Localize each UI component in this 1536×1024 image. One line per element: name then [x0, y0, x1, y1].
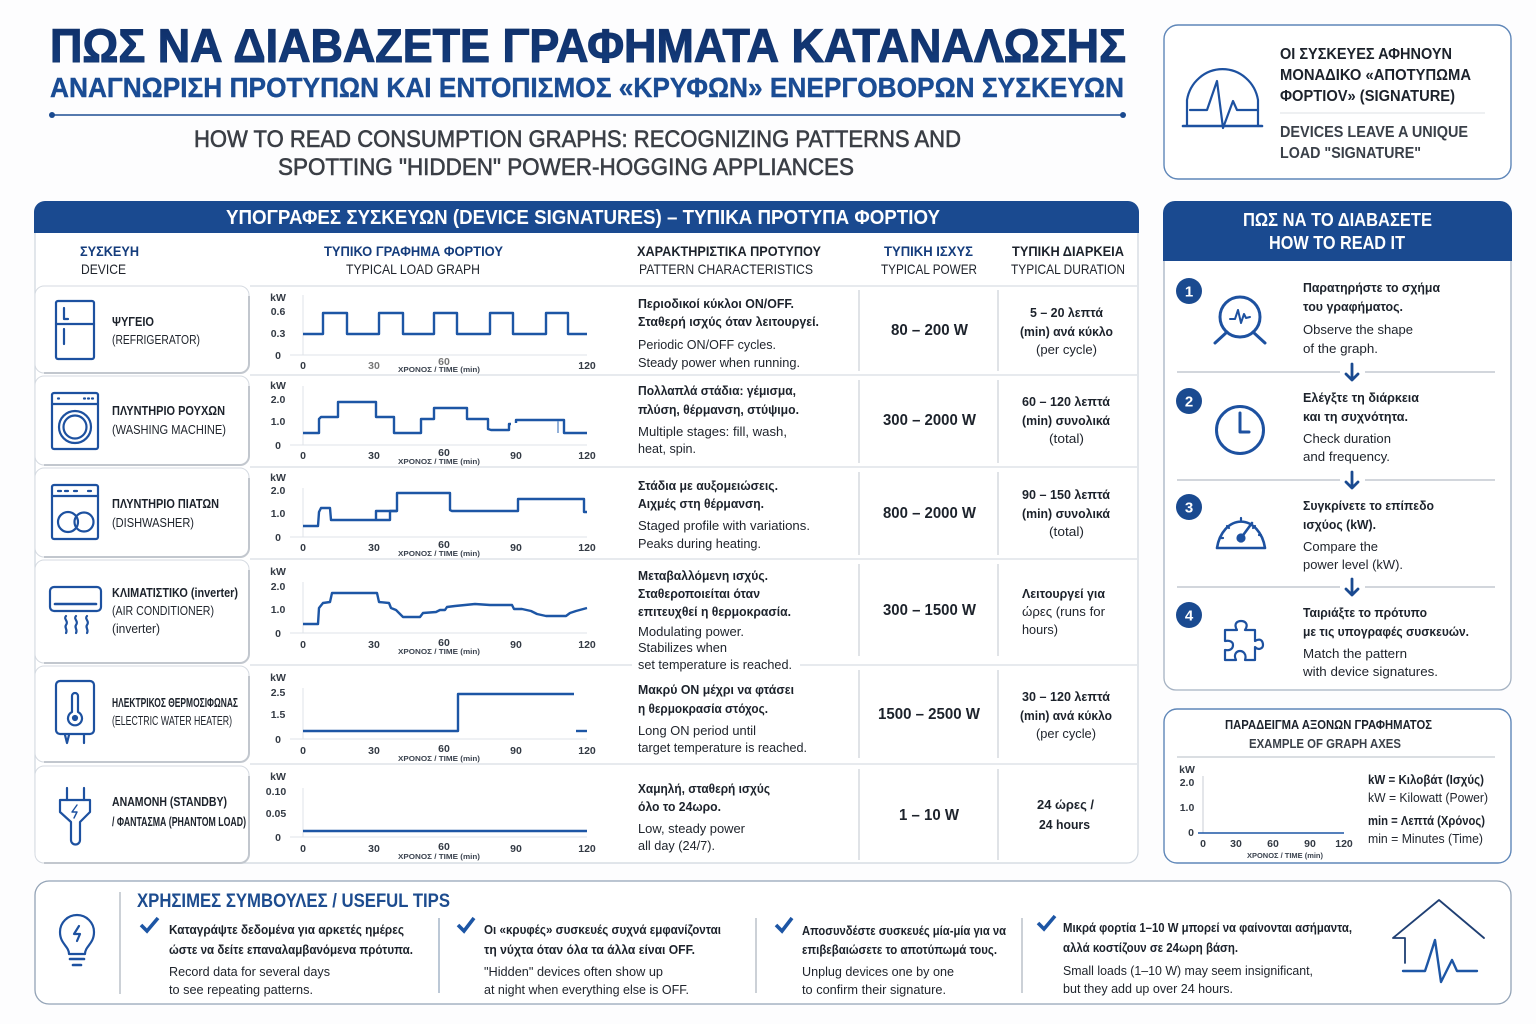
pattern characteristics: Low, steady power: [638, 821, 746, 836]
step 3 text: Συγκρίνετε το επίπεδο: [1303, 498, 1434, 513]
chart: standby load: 120: [578, 843, 596, 855]
chart: standby load: [266, 771, 596, 861]
typical power: 1500 – 2500 W: [878, 706, 981, 723]
icon: check 3: [776, 918, 792, 931]
row: air conditioner: [35, 560, 1106, 672]
title rule: [49, 112, 1126, 118]
chart: axes example: 1.0: [1180, 802, 1194, 814]
pattern characteristics: Multiple stages: fill, wash,: [638, 424, 787, 439]
typical duration: (min) συνολικά: [1022, 413, 1110, 428]
pattern characteristics: all day (24/7).: [638, 838, 715, 853]
step 2 text: και τη συχνότητα.: [1303, 409, 1408, 424]
typical duration: [1037, 797, 1094, 832]
step 4 text: με τις υπογραφές συσκευών.: [1303, 624, 1469, 639]
icon: check 4: [1038, 916, 1055, 929]
device card: air conditioner: [35, 560, 249, 663]
callout greek text: [1280, 46, 1471, 105]
pattern characteristics: set temperature is reached.: [638, 657, 792, 672]
step 3 text: Compare the: [1303, 539, 1378, 554]
chart: washing machine load: [270, 380, 596, 466]
tip 2: "Hidden" devices often show up: [484, 964, 663, 979]
device card: refrigerator: [35, 286, 249, 373]
chart: refrigerator load: 60: [438, 356, 450, 368]
callout greek text: ΦΟΡΤΙΟV» (SIGNATURE): [1280, 88, 1455, 105]
chart: air conditioner load: 120: [578, 639, 596, 651]
device name: [112, 695, 238, 728]
typical duration: 24 hours: [1039, 817, 1090, 832]
icon: refrigerator: [56, 301, 94, 359]
chart: air conditioner load: 0: [300, 639, 306, 651]
icon: air conditioner: [50, 587, 101, 633]
device name: (ELECTRIC WATER HEATER): [112, 713, 232, 728]
device name: (AIR CONDITIONER): [112, 603, 214, 618]
chart: air conditioner load: kW: [270, 566, 286, 578]
tip 1: Καταγράψτε δεδομένα για αρκετές ημέρες: [169, 922, 404, 937]
pattern characteristics: Πολλαπλά στάδια: γέμισμα,: [638, 383, 796, 398]
chart: washing machine load: 1.0: [271, 416, 285, 428]
device card: water heater: [35, 666, 249, 762]
callout english text: DEVICES LEAVE A UNIQUE: [1280, 124, 1468, 141]
chart: standby load: 0.05: [266, 808, 286, 820]
pattern characteristics: Long ON period until: [638, 723, 756, 738]
chart: refrigerator load: 0: [275, 350, 281, 362]
chart: standby load: 0.10: [266, 786, 286, 798]
chart: refrigerator load: ΧΡΟΝΟΣ / TIME (min): [398, 365, 481, 374]
chart: water heater load: [270, 672, 596, 763]
axes heading: ΠΑΡΑΔΕΙΓΜΑ ΑΞΟΝΩΝ ΓΡΑΦΗΜΑΤΟΣ: [1225, 717, 1432, 732]
callout english text: LOAD "SIGNATURE": [1280, 145, 1421, 162]
tip 1: to see repeating patterns.: [169, 982, 313, 997]
main title: ΠΩΣ ΝΑ ΔΙΑΒΑΖΕΤΕ ΓΡΑΦΗΜΑΤΑ ΚΑΤΑΝΑΛΩΣΗΣ: [50, 19, 1126, 72]
device name: / ΦΑΝΤΑΣΜΑ (PHANTOM LOAD): [112, 814, 246, 829]
pattern characteristics: Χαμηλή, σταθερή ισχύς: [638, 781, 770, 796]
chart: standby load: ΧΡΟΝΟΣ / TIME (min): [398, 852, 481, 861]
english subtitle: HOW TO READ CONSUMPTION GRAPHS: RECOGNIZING PATTERNS AND: [194, 126, 961, 153]
greek subtitle: ΑΝΑΓΝΩΡΙΣΗ ΠΡΟΤΥΠΩΝ ΚΑΙ ΕΝΤΟΠΙΣΜΟΣ «ΚΡΥΦΩΝ» ΕΝΕΡΓΟΒΟΡΩΝ ΣΥΣΚΕΥΩΝ: [50, 72, 1124, 103]
step 4 text: [1302, 605, 1469, 679]
typical duration: 30 – 120 λεπτά: [1022, 689, 1110, 704]
pattern characteristics: όλο το 24ωρο.: [638, 799, 721, 814]
pattern characteristics: [638, 383, 799, 456]
tip 1: ώστε να δείτε επαναλαμβανόμενα πρότυπα.: [169, 942, 413, 957]
chart: air conditioner load: 90: [510, 639, 522, 651]
step 4 text: Ταιριάξτε το πρότυπο: [1303, 605, 1427, 620]
chart: water heater load: 0: [275, 734, 281, 746]
tip 1: Record data for several days: [169, 964, 330, 979]
tip 4: [1038, 916, 1352, 996]
typical duration: (total): [1049, 524, 1084, 539]
row: standby phantom load: [35, 766, 1094, 863]
typical duration: 60 – 120 λεπτά: [1022, 394, 1110, 409]
chart: dishwasher load: 2.0: [271, 485, 285, 497]
step 2: [1176, 388, 1419, 464]
device card: washing machine: [35, 376, 249, 465]
typical power: 800 – 2000 W: [883, 505, 977, 522]
step 3 text: ισχύος (kW).: [1303, 517, 1376, 532]
device name: [112, 314, 200, 347]
pattern characteristics: target temperature is reached.: [638, 740, 807, 755]
pattern characteristics: heat, spin.: [638, 441, 696, 456]
typical duration: 90 – 150 λεπτά: [1022, 487, 1110, 502]
tip 4: Small loads (1–10 W) may seem insignificant,: [1063, 963, 1313, 978]
row: washing machine: [35, 376, 1110, 466]
tip 2: τη νύχτα όταν όλα τα άλλα είναι OFF.: [484, 942, 695, 957]
chart: standby load: 60: [438, 841, 450, 853]
chart: water heater load: 90: [510, 745, 522, 757]
icon: gauge: [1217, 518, 1265, 548]
step number 1: [1176, 278, 1202, 304]
pattern characteristics: Peaks during heating.: [638, 536, 761, 551]
step number 1: 1: [1185, 284, 1193, 300]
chart: washing machine load: 120: [578, 450, 596, 462]
device name: (DISHWASHER): [112, 515, 194, 530]
step 1 text: of the graph.: [1303, 341, 1378, 356]
typical duration: (min) ανά κύκλο: [1020, 708, 1112, 723]
column headings: ΧΑΡΑΚΤΗΡΙΣΤΙΚΑ ΠΡΟΤΥΠΟΥ: [637, 243, 822, 259]
icon: light bulb: [60, 915, 94, 965]
chart: water heater load: ΧΡΟΝΟΣ / TIME (min): [398, 754, 481, 763]
device name: (WASHING MACHINE): [112, 422, 226, 437]
chart: air conditioner load: 0: [275, 628, 281, 640]
device name: [112, 496, 219, 530]
chart: air conditioner load: 2.0: [271, 581, 285, 593]
row: refrigerator: [35, 286, 1113, 374]
chart: dishwasher load: 90: [510, 542, 522, 554]
icon: washing machine: [52, 393, 98, 449]
typical duration: hours): [1022, 622, 1058, 637]
how-to header: [1163, 201, 1512, 261]
step 4 text: with device signatures.: [1302, 664, 1438, 679]
step number 4: 4: [1185, 608, 1194, 624]
icon: magnifier with graph: [1215, 297, 1265, 343]
chart: dishwasher load: 30: [368, 542, 380, 554]
pattern characteristics: Μακρύ ON μέχρι να φτάσει: [638, 682, 794, 697]
chart: axes example: ΧΡΟΝΟΣ / TIME (min): [1247, 851, 1323, 860]
tip 2: Οι «κρυφές» συσκευές συχνά εμφανίζονται: [484, 922, 721, 937]
chart: standby load: 0: [275, 832, 281, 844]
step 3: [1176, 494, 1434, 572]
chart: dishwasher load: 120: [578, 542, 596, 554]
column headings: TYPICAL DURATION: [1011, 261, 1125, 277]
step number 2: 2: [1185, 394, 1193, 410]
callout greek text: ΟΙ ΣΥΣΚΕΥΕΣ ΑΦΗΝΟΥΝ: [1280, 46, 1452, 63]
device name: [112, 585, 238, 636]
axes legend: kW = Kilowatt (Power): [1368, 790, 1488, 805]
chart: axes example: [1179, 764, 1353, 860]
callout english text: [1280, 124, 1468, 162]
typical duration: Λειτουργεί για: [1022, 586, 1105, 601]
chart: axes example: 60: [1267, 838, 1279, 850]
chart: air conditioner load: 60: [438, 637, 450, 649]
icon: dome with load pulse: [1183, 69, 1262, 128]
typical duration: (per cycle): [1036, 342, 1097, 357]
device name: ΠΛΥΝΤΗΡΙΟ ΠΙΑΤΩΝ: [112, 496, 219, 511]
pattern characteristics: [638, 682, 807, 755]
arrow: step 1 to 2: [1177, 364, 1495, 380]
chart: refrigerator load: 0.6: [271, 306, 285, 318]
chart: dishwasher load: 0: [300, 542, 306, 554]
typical power: 300 – 2000 W: [883, 412, 977, 429]
step 4 text: Match the pattern: [1303, 646, 1407, 661]
typical duration: (total): [1049, 431, 1084, 446]
axes legend: kW = Κιλοβάτ (Ισχύς): [1368, 772, 1484, 787]
chart: washing machine load: 0: [275, 440, 281, 452]
chart: water heater load: kW: [270, 672, 286, 684]
typical duration: [1022, 487, 1110, 539]
device name: [112, 794, 246, 829]
icon: house with pulse: [1393, 900, 1484, 982]
typical duration: (min) συνολικά: [1022, 506, 1110, 521]
typical power: 300 – 1500 W: [883, 602, 977, 619]
pattern characteristics: η θερμοκρασία στόχος.: [638, 701, 768, 716]
chart: axes example: 0: [1200, 838, 1206, 850]
chart: axes example: 120: [1335, 838, 1353, 850]
icon: check 2: [458, 918, 474, 931]
chart: water heater load: 30: [368, 745, 380, 757]
typical duration: 24 ώρες /: [1037, 797, 1094, 812]
chart: axes example: 0: [1188, 827, 1194, 839]
chart: refrigerator load: 0.3: [271, 328, 285, 340]
column headings: ΤΥΠΙΚΗ ΙΣΧΥΣ: [884, 243, 973, 259]
typical power: 80 – 200 W: [891, 322, 969, 339]
row: electric water heater: [35, 666, 1112, 763]
chart: standby load: 30: [368, 843, 380, 855]
chart: refrigerator load: [270, 292, 596, 374]
step 1: [1176, 278, 1440, 356]
step number 3: 3: [1185, 500, 1193, 516]
icon: puzzle piece: [1225, 621, 1263, 660]
chart: water heater load: 1.5: [271, 709, 285, 721]
tip 4: Μικρά φορτία 1–10 W μπορεί να φαίνονται ασήμαντα,: [1063, 920, 1352, 935]
panel: useful tips: [35, 881, 1511, 1004]
column headings: TYPICAL LOAD GRAPH: [346, 261, 480, 277]
axes heading: [1225, 717, 1432, 751]
chart: refrigerator load: 120: [578, 360, 596, 372]
icon: plug: [60, 788, 90, 844]
device name: ΚΛΙΜΑΤΙΣΤΙΚΟ (inverter): [112, 585, 238, 600]
tip 4: but they add up over 24 hours.: [1063, 981, 1233, 996]
typical duration: ώρες (runs for: [1022, 604, 1106, 619]
chart: washing machine load: 30: [368, 450, 380, 462]
row: dishwasher: [35, 468, 1110, 558]
pattern characteristics: Modulating power.: [638, 624, 744, 639]
how-to header: ΠΩΣ ΝΑ ΤΟ ΔΙΑΒΑΣΕΤΕ: [1243, 210, 1432, 230]
arrow: step 2 to 3: [1177, 472, 1495, 488]
chart: dishwasher load: kW: [270, 472, 286, 484]
step 1 text: του γραφήματος.: [1303, 299, 1403, 314]
chart: air conditioner load: ΧΡΟΝΟΣ / TIME (min): [398, 647, 481, 656]
chart: refrigerator load: kW: [270, 292, 286, 304]
typical power: 1 – 10 W: [899, 807, 960, 824]
step 2 text: [1303, 390, 1419, 464]
chart: water heater load: 2.5: [271, 687, 285, 699]
step 2 text: Ελέγξτε τη διάρκεια: [1303, 390, 1419, 405]
panel: how to read it: [1163, 201, 1512, 690]
step number 4: [1176, 602, 1202, 628]
english subtitle: [194, 126, 961, 181]
chart: water heater load: 60: [438, 743, 450, 755]
icon: check 1: [141, 918, 158, 931]
chart: refrigerator load: 30: [368, 360, 380, 372]
pattern characteristics: [638, 296, 819, 370]
tip 3: [776, 918, 1006, 997]
tip 3: to confirm their signature.: [802, 982, 946, 997]
pattern characteristics: επιτευχθεί η θερμοκρασία.: [638, 604, 791, 619]
tip 2: at night when everything else is OFF.: [484, 982, 689, 997]
icon: clock: [1216, 406, 1264, 454]
pattern characteristics: Περιοδικοί κύκλοι ON/OFF.: [638, 296, 794, 311]
tip 4: αλλά κοστίζουν σε 24ωρη βάση.: [1063, 940, 1238, 955]
typical duration: [1022, 586, 1106, 637]
arrow: step 3 to 4: [1177, 579, 1495, 595]
column headings: ΣΥΣΚΕΥΗ: [80, 243, 139, 259]
panel: device signatures table: [34, 201, 1139, 863]
step 3 text: power level (kW).: [1303, 557, 1403, 572]
pattern characteristics: Μεταβαλλόμενη ισχύς.: [638, 568, 768, 583]
device name: (REFRIGERATOR): [112, 332, 200, 347]
column headings: TYPICAL POWER: [881, 261, 977, 277]
device name: ΨΥΓΕΙΟ: [112, 314, 154, 329]
panel: example of graph axes: [1164, 709, 1511, 863]
panel: signature callout: [1164, 25, 1511, 179]
chart: washing machine load: ΧΡΟΝΟΣ / TIME (min): [398, 457, 481, 466]
chart: standby load: 90: [510, 843, 522, 855]
column headings: ΤΥΠΙΚΟ ΓΡΑΦΗΜΑ ΦΟΡΤΙΟΥ: [324, 243, 504, 259]
step 1 text: Παρατηρήστε το σχήμα: [1303, 280, 1440, 295]
chart: washing machine load: 60: [438, 447, 450, 459]
chart: washing machine load: 2.0: [271, 394, 285, 406]
step 1 text: [1303, 280, 1440, 356]
tip 2: [458, 918, 721, 997]
column headings: [80, 243, 1125, 277]
device name: (inverter): [112, 621, 160, 636]
english subtitle: SPOTTING "HIDDEN" POWER-HOGGING APPLIANCES: [278, 154, 854, 181]
chart: standby load: kW: [270, 771, 286, 783]
device name: ΠΛΥΝΤΗΡΙΟ ΡΟΥΧΩΝ: [112, 403, 225, 418]
pattern characteristics: Αιχμές στη θέρμανση.: [638, 496, 764, 511]
typical duration: [1020, 689, 1112, 741]
step 3 text: [1303, 498, 1434, 572]
step 1 text: Observe the shape: [1303, 322, 1413, 337]
chart: dishwasher load: 1.0: [271, 508, 285, 520]
tip 3: επιβεβαιώσετε το αποτύπωμά τους.: [802, 942, 997, 957]
callout greek text: ΜΟΝΑΔΙΚΟ «ΑΠΟΤΥΠΩΜΑ: [1280, 67, 1471, 84]
pattern characteristics: Steady power when running.: [638, 355, 800, 370]
pattern characteristics: Σταθεροποιείται όταν: [638, 586, 760, 601]
device name: ΑΝΑΜΟΝΗ (STANDBY): [112, 794, 227, 809]
pattern characteristics: [638, 781, 770, 853]
icon: water heater: [56, 681, 94, 743]
axes heading: EXAMPLE OF GRAPH AXES: [1249, 736, 1401, 751]
step 4: [1176, 602, 1469, 679]
pattern characteristics: Σταθερή ισχύς όταν λειτουργεί.: [638, 314, 819, 329]
chart: air conditioner load: 1.0: [271, 604, 285, 616]
chart: washing machine load: 90: [510, 450, 522, 462]
pattern characteristics: πλύση, θέρμανση, στύψιμο.: [638, 402, 799, 417]
typical duration: [1020, 305, 1113, 357]
tip 3: Unplug devices one by one: [802, 964, 954, 979]
axes legend: [1368, 772, 1488, 846]
chart: washing machine load: kW: [270, 380, 286, 392]
step number 2: [1176, 388, 1202, 414]
tips heading: ΧΡΗΣΙΜΕΣ ΣΥΜΒΟΥΛΕΣ / USEFUL TIPS: [137, 891, 450, 912]
device card: standby: [35, 766, 249, 863]
chart: axes example: 2.0: [1180, 777, 1194, 789]
chart: dishwasher load: 0: [275, 532, 281, 544]
column headings: ΤΥΠΙΚΗ ΔΙΑΡΚΕΙΑ: [1012, 243, 1124, 259]
typical duration: 5 – 20 λεπτά: [1030, 305, 1103, 320]
typical duration: [1022, 394, 1110, 446]
table header bar: [34, 201, 1139, 233]
pattern characteristics: [638, 568, 792, 672]
chart: air conditioner load: 30: [368, 639, 380, 651]
typical duration: (min) ανά κύκλο: [1020, 324, 1113, 339]
pattern characteristics: Staged profile with variations.: [638, 518, 810, 533]
typical duration: (per cycle): [1036, 726, 1096, 741]
chart: air conditioner load: [270, 566, 596, 656]
device name: [112, 403, 226, 437]
step number 3: [1176, 494, 1202, 520]
chart: dishwasher load: ΧΡΟΝΟΣ / TIME (min): [398, 549, 481, 558]
column headings: PATTERN CHARACTERISTICS: [639, 261, 813, 277]
step 2 text: Check duration: [1303, 431, 1391, 446]
tip 1: [141, 918, 413, 997]
device card: dishwasher: [35, 468, 249, 557]
column headings: DEVICE: [81, 261, 126, 277]
chart: dishwasher load: [270, 472, 596, 558]
device name: ΗΛΕΚΤΡΙΚΟΣ ΘΕΡΜΟΣΙΦΩΝΑΣ: [112, 695, 238, 710]
table header bar: ΥΠΟΓΡΑΦΕΣ ΣΥΣΚΕΥΩΝ (DEVICE SIGNATURES) – ΤΥΠΙΚΑ ΠΡΟΤΥΠΑ ΦΟΡΤΙΟΥ: [226, 207, 941, 229]
how-to header: HOW TO READ IT: [1269, 233, 1405, 253]
pattern characteristics: Stabilizes when: [638, 640, 727, 655]
chart: dishwasher load: 60: [438, 539, 450, 551]
chart: standby load: 0: [300, 843, 306, 855]
chart: water heater load: 0: [300, 745, 306, 757]
title block: [49, 19, 1126, 181]
pattern characteristics: Στάδια με αυξομειώσεις.: [638, 478, 778, 493]
step 2 text: and frequency.: [1303, 449, 1390, 464]
icon: dishwasher: [52, 485, 98, 539]
pattern characteristics: Periodic ON/OFF cycles.: [638, 337, 776, 352]
chart: axes example: 90: [1304, 838, 1316, 850]
chart: refrigerator load: 0: [300, 360, 306, 372]
pattern characteristics: [638, 478, 810, 551]
chart: axes example: 30: [1230, 838, 1242, 850]
axes legend: min = Minutes (Time): [1368, 831, 1483, 846]
chart: axes example: kW: [1179, 764, 1195, 776]
tip 3: Αποσυνδέστε συσκευές μία-μία για να: [802, 923, 1006, 938]
chart: washing machine load: 0: [300, 450, 306, 462]
axes legend: min = Λεπτά (Χρόνος): [1368, 813, 1485, 828]
chart: water heater load: 120: [578, 745, 596, 757]
